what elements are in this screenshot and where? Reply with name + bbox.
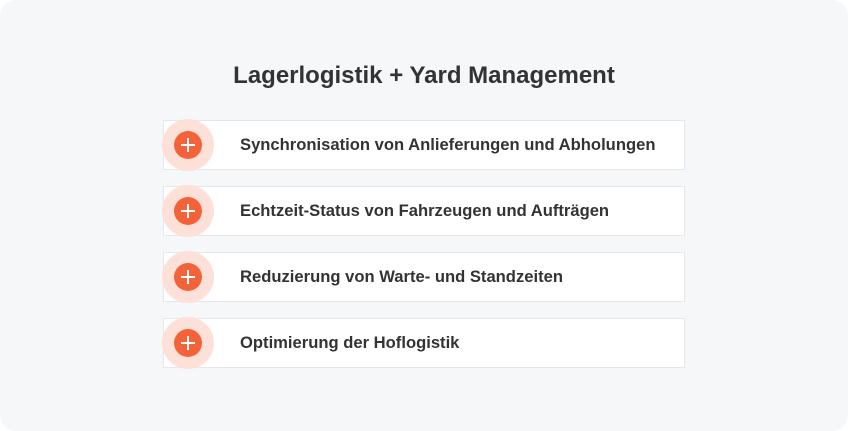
title: Lagerlogistik + Yard Management (233, 62, 615, 89)
row 3 (162, 251, 685, 303)
icon: plus (162, 119, 214, 171)
text 2: Echtzeit-Status von Fahrzeugen und Aufträgen (240, 201, 609, 220)
icon: plus (162, 185, 214, 237)
row 2 (162, 185, 685, 237)
icon: plus (162, 317, 214, 369)
row 4 (162, 317, 685, 369)
icon: plus (162, 251, 214, 303)
row 1 (162, 119, 685, 171)
text 4: Optimierung der Hoflogistik (240, 333, 459, 352)
text 3: Reduzierung von Warte- und Standzeiten (240, 267, 563, 286)
text 1: Synchronisation von Anlieferungen und Abholungen (240, 135, 655, 154)
